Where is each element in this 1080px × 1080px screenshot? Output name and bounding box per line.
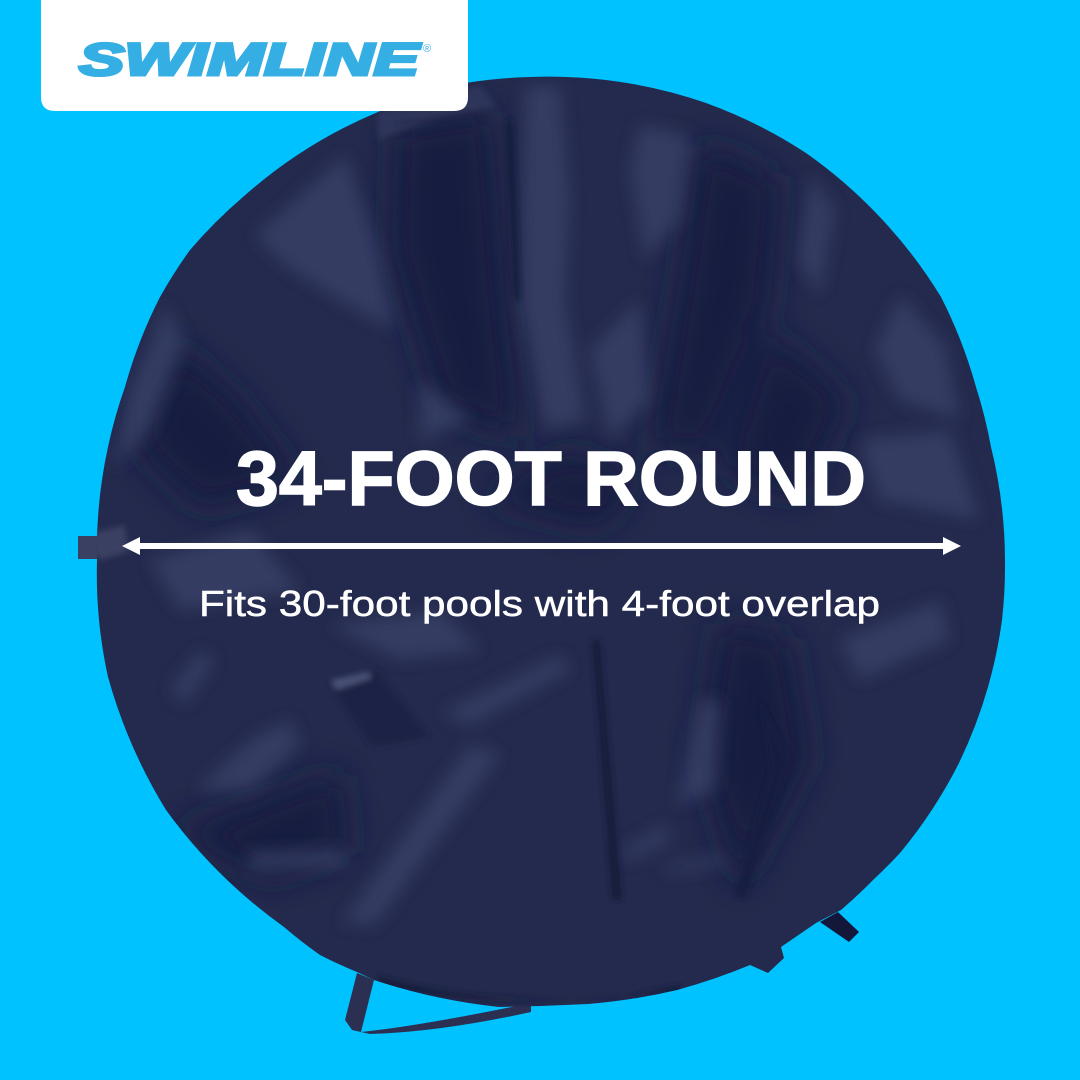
heading: 34-FOOT ROUND: 34-FOOT ROUND (236, 436, 866, 522)
strap: left edge tab (78, 536, 110, 559)
caption: fit description: Fits 30-foot pools with 4-foot overlap (199, 583, 880, 624)
logo panel: white rounded tab with Swimline wordmark (41, 0, 468, 111)
logo registered mark: ® (423, 43, 431, 55)
strap: bottom right (820, 912, 859, 942)
strap: bottom left loop (345, 973, 531, 1034)
logo wordmark: SWIMLINE (79, 34, 422, 85)
arrow: diameter dimension line (122, 537, 961, 555)
fold: rectangular crease at lower left (340, 674, 424, 744)
cover body with fabric folds (96, 76, 1006, 1007)
